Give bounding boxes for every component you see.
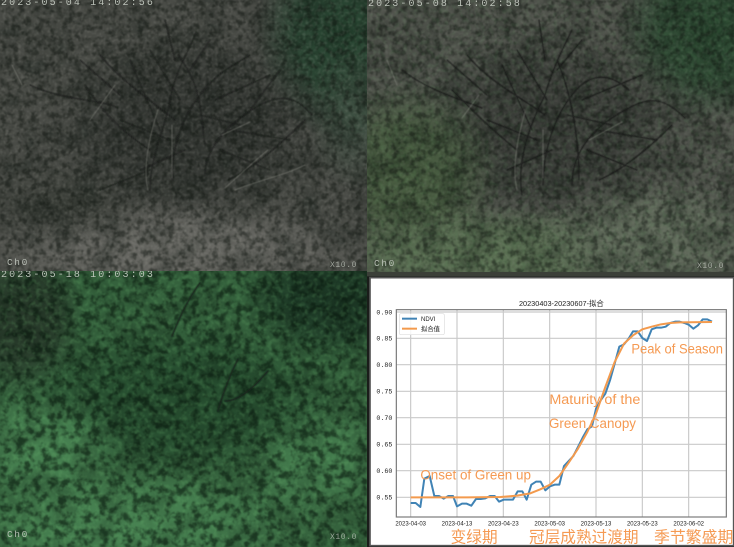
fitted curve [411, 322, 712, 497]
photo: tree canopy starting to green [367, 0, 734, 272]
season period labels: 季节繁盛期 [654, 524, 733, 547]
phenology annotations: Maturity of the [549, 392, 640, 407]
x axis labels: 2023-04-13 [442, 522, 473, 528]
y axis labels: 0.60 [376, 467, 392, 475]
x axis labels: 2023-04-03 [395, 522, 427, 528]
channel label: Ch0 [7, 529, 29, 540]
x axis labels: 2023-05-13 [581, 522, 612, 528]
y axis labels: 0.55 [376, 494, 392, 502]
x axis labels: 2023-04-23 [488, 522, 519, 528]
panel: NDVI line chart with phenology labels [367, 272, 734, 547]
photo: leafless tree canopy [0, 0, 367, 271]
zoom readout: X10.0 [330, 261, 357, 270]
photo panel: canopy on 2023-05-18 [0, 271, 367, 547]
season period labels: 变绿期 [451, 524, 498, 547]
legend [399, 314, 444, 335]
x axis labels: 2023-05-03 [534, 522, 566, 528]
legend: NDVI [421, 317, 436, 323]
y axis labels: 0.70 [376, 414, 392, 422]
gridlines and axes [396, 310, 726, 517]
legend: 拟合值 [421, 324, 441, 333]
phenology annotations: Onset of Green up [420, 467, 531, 482]
x axis labels: 2023-06-02 [673, 522, 705, 528]
NDVI line [411, 319, 712, 507]
season period labels: 冠层成熟过渡期 [529, 524, 639, 547]
season period labels [451, 524, 733, 547]
y axis labels: 0.90 [376, 308, 392, 316]
x axis labels [395, 522, 705, 528]
photo panel: canopy on 2023-05-08 [367, 0, 734, 272]
phenology annotations: Green Canopy [549, 416, 636, 431]
zoom readout: X10.0 [697, 262, 724, 271]
phenology annotations: Peak of Season [631, 342, 723, 357]
y axis labels: 0.65 [376, 441, 392, 449]
channel label: Ch0 [374, 258, 396, 269]
y axis labels: 0.85 [376, 335, 392, 343]
chart title: 20230403-20230607-拟合 [519, 299, 604, 308]
y axis labels [376, 308, 392, 502]
photo panel: canopy on 2023-05-04 [0, 0, 367, 271]
zoom readout: X10.0 [330, 533, 357, 542]
phenology annotations [420, 342, 723, 482]
channel label: Ch0 [7, 257, 29, 268]
y axis labels: 0.75 [376, 388, 392, 396]
x axis labels: 2023-05-23 [627, 522, 658, 528]
y axis labels: 0.80 [376, 361, 392, 369]
photo: full green canopy [0, 271, 367, 547]
